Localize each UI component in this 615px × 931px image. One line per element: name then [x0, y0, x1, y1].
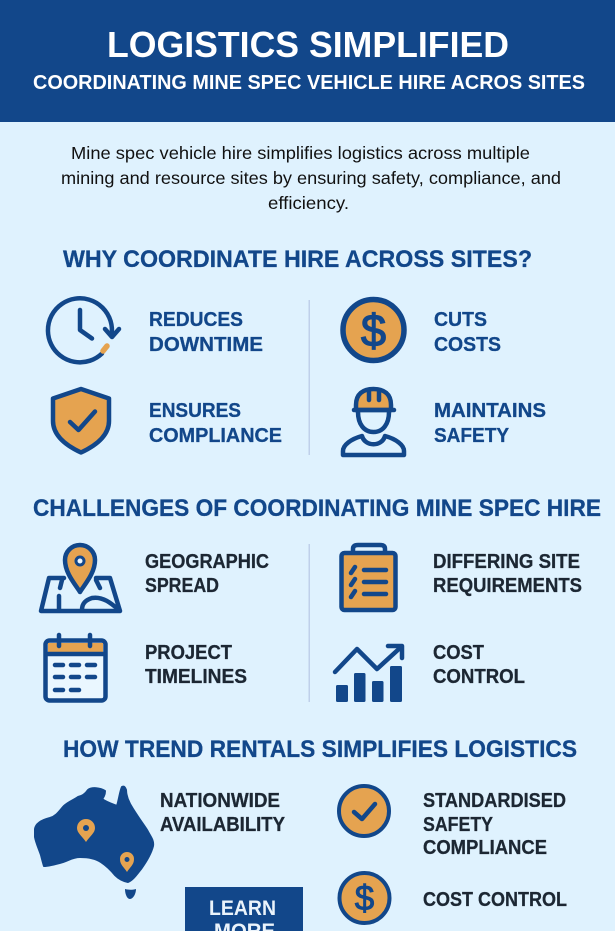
- label: geographic spread: [145, 550, 269, 597]
- label: project timelines: PROJECT: [145, 641, 232, 664]
- label: geographic spread: GEOGRAPHIC: [145, 550, 269, 573]
- intro paragraph: [61, 143, 561, 213]
- icon: map with pin: [41, 545, 120, 611]
- label: nationwide availability: [160, 789, 285, 836]
- label: project timelines: TIMELINES: [145, 665, 247, 688]
- label: ensures compliance: [149, 399, 282, 447]
- label: nationwide availability: AVAILABILITY: [160, 813, 285, 836]
- icon: shield: [53, 389, 109, 452]
- label: ensures compliance: COMPLIANCE: [149, 424, 282, 447]
- label: standardised safety compliance: [423, 789, 566, 859]
- label: differing site requirements: [433, 550, 582, 597]
- icon: calendar: [46, 635, 106, 700]
- subtitle: COORDINATING MINE SPEC VEHICLE HIRE ACROS SITES: [33, 71, 585, 94]
- heading: how trend rentals: HOW TREND RENTALS SIMPLIFIES LOGISTICS: [63, 736, 577, 763]
- label: cost control: COST: [433, 641, 484, 664]
- label: cuts costs: COSTS: [434, 333, 501, 356]
- label: standardised safety compliance: SAFETY: [423, 813, 493, 836]
- icon: clipboard checklist: [342, 545, 396, 610]
- icon: clock: [48, 298, 119, 362]
- label: reduces downtime: [149, 308, 263, 356]
- label: standardised safety compliance: COMPLIANCE: [423, 836, 547, 859]
- heading: why coordinate: WHY COORDINATE HIRE ACROSS SITES?: [63, 246, 532, 273]
- label: reduces downtime: DOWNTIME: [149, 333, 263, 356]
- icon: rising bar chart: [335, 646, 402, 702]
- label: maintains safety: [434, 399, 546, 447]
- intro paragraph: Mine spec vehicle hire simplifies logistics across multiple: [71, 143, 530, 163]
- header banner: [0, 0, 615, 122]
- label: nationwide availability: NATIONWIDE: [160, 789, 280, 812]
- label: cost control: COST CONTROL: [423, 888, 567, 911]
- button: learn more: LEARN: [209, 897, 276, 920]
- label: reduces downtime: REDUCES: [149, 308, 243, 331]
- label: standardised safety compliance: STANDARDISED: [423, 789, 566, 812]
- title: LOGISTICS SIMPLIFIED: [107, 24, 509, 65]
- intro paragraph: efficiency.: [268, 193, 349, 213]
- icon: dollar circle: $: [355, 879, 374, 918]
- label: project timelines: [145, 641, 247, 688]
- button: learn more: [185, 887, 303, 931]
- label: cuts costs: CUTS: [434, 308, 487, 331]
- location pin: south east: [120, 852, 134, 872]
- location pin: central: [77, 819, 95, 842]
- label: ensures compliance: ENSURES: [149, 399, 241, 422]
- label: maintains safety: MAINTAINS: [434, 399, 546, 422]
- intro paragraph: mining and resource sites by ensuring safety, compliance, and: [61, 168, 561, 188]
- label: maintains safety: SAFETY: [434, 424, 509, 447]
- label: geographic spread: SPREAD: [145, 574, 219, 597]
- icon: dollar coin: [343, 300, 404, 360]
- icon: dollar coin: $: [361, 305, 386, 356]
- label: cost control: CONTROL: [433, 665, 525, 688]
- label: differing site requirements: REQUIREMENTS: [433, 574, 582, 597]
- icon: dollar circle: [340, 873, 390, 923]
- label: cuts costs: [434, 308, 501, 356]
- icon: australia map: [35, 787, 153, 899]
- label: cost control: [433, 641, 525, 688]
- icon: check circle: [339, 786, 389, 836]
- icon: worker with hard hat: [343, 389, 404, 455]
- label: differing site requirements: DIFFERING SITE: [433, 550, 580, 573]
